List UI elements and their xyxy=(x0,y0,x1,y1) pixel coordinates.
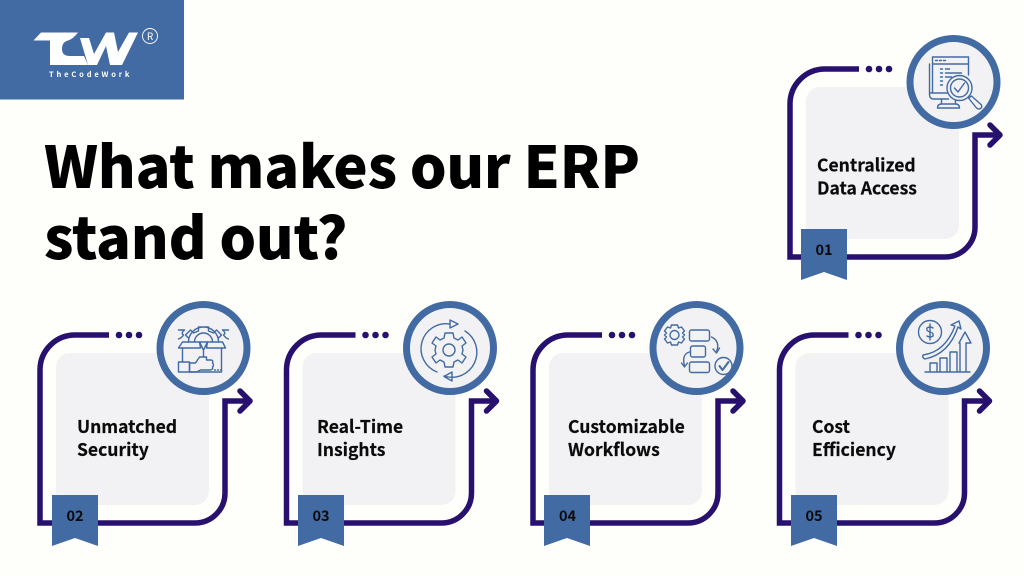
card 03: Real-Time Insights: 03 xyxy=(312,505,330,526)
card 05: Cost Efficiency: 05 xyxy=(806,505,823,526)
card 04: Customizable Workflows: Workflows xyxy=(568,437,660,462)
icon: open box with hand xyxy=(178,327,228,372)
title: stand out? xyxy=(44,192,347,276)
card 03: Real-Time Insights: Real-Time xyxy=(317,414,403,439)
logo: TheCodeWork: TheCodeWork xyxy=(49,69,132,80)
icon: workflow with gear and check xyxy=(664,325,732,374)
icon: monitor with magnifier xyxy=(930,57,982,109)
logo: TheCodeWork xyxy=(0,0,184,100)
card 01: Centralized Data Access: 01 xyxy=(816,239,833,260)
card 04: Customizable Workflows: Customizable xyxy=(568,414,685,439)
card 05: Cost Efficiency xyxy=(780,304,990,546)
card 04: Customizable Workflows xyxy=(533,304,743,546)
title: What makes our ERP xyxy=(44,121,640,205)
card 02: Unmatched Security xyxy=(40,304,250,546)
card 05: Cost Efficiency: Cost xyxy=(812,414,850,439)
logo: TheCodeWork: R xyxy=(147,28,154,43)
card 02: Unmatched Security: Security xyxy=(77,437,149,462)
card 05: Cost Efficiency: Efficiency xyxy=(812,437,896,462)
card 02: Unmatched Security: Unmatched xyxy=(77,414,177,439)
card 01: Centralized Data Access xyxy=(790,38,1000,280)
card 01: Centralized Data Access: Centralized xyxy=(817,152,916,178)
card 03: Real-Time Insights: Insights xyxy=(317,437,386,462)
card 03: Real-Time Insights xyxy=(286,304,496,546)
card 04: Customizable Workflows: 04 xyxy=(559,505,577,526)
card 01: Centralized Data Access: Data Access xyxy=(817,176,917,200)
icon: dollar and rising chart xyxy=(918,320,971,372)
card 02: Unmatched Security: 02 xyxy=(66,505,84,526)
icon: gear with cycle arrows xyxy=(421,320,477,381)
